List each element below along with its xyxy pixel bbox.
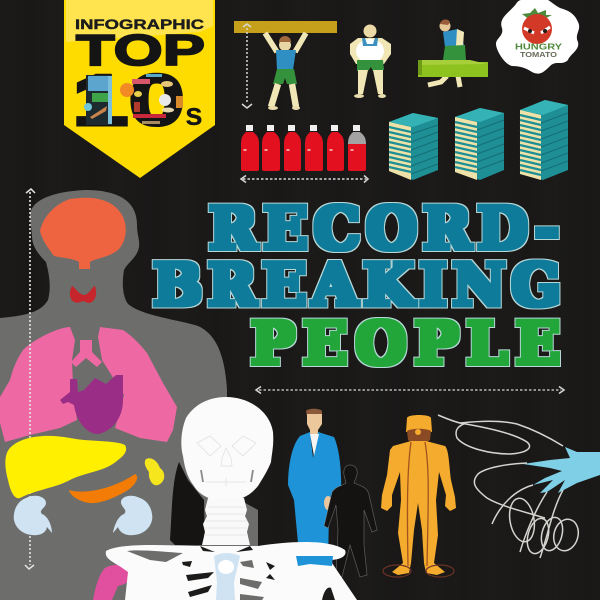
dotted width arrow under bottles <box>241 176 368 182</box>
sternum <box>214 553 240 600</box>
pink arm bone <box>93 565 131 600</box>
series label: 10s <box>72 61 203 141</box>
blue suited tall man <box>288 409 341 565</box>
gaps between ribs <box>127 546 335 600</box>
collarbones and ribcage <box>106 542 357 600</box>
logo wordmark: HUNGRY <box>515 42 562 52</box>
right lung <box>98 327 177 442</box>
brain <box>40 198 126 269</box>
heart <box>60 375 123 434</box>
stack of books 2 <box>455 108 504 180</box>
series label: Infographic: INFOGRAPHIC <box>75 17 204 32</box>
golden man with long hair <box>381 415 456 577</box>
hand with long curling nails <box>438 415 600 558</box>
strongman carrying green block <box>418 20 488 87</box>
left lung <box>0 327 77 442</box>
dotted height arrow beside body <box>25 189 35 569</box>
badge: Infographic Top 10s <box>64 0 215 178</box>
strongman lifting bar overhead <box>234 21 337 110</box>
logo wordmark second line: TOMATO <box>520 52 558 59</box>
series label: 10s: s <box>185 96 203 132</box>
outlined small man silhouette <box>324 465 377 577</box>
right kidney <box>113 496 152 535</box>
skull facial features <box>197 436 256 486</box>
logo: Hungry Tomato <box>496 0 579 74</box>
thyroid <box>70 286 96 303</box>
neck vertebrae <box>202 498 250 545</box>
stack of books 3 <box>520 100 568 180</box>
dotted width arrow under title <box>256 386 564 394</box>
title line: Record-: RECORD- <box>209 194 559 262</box>
title line: People: PEOPLE <box>251 310 560 378</box>
six red bottles <box>241 125 366 171</box>
stack of books 1 <box>389 113 438 180</box>
spleen <box>145 458 164 485</box>
series label: Top: TOP <box>76 26 205 75</box>
series label: 10s: 10 <box>72 61 185 141</box>
title <box>153 194 561 378</box>
strongman with white belly <box>350 24 391 98</box>
skeleton <box>106 397 357 600</box>
lungs <box>0 327 177 442</box>
anatomy figure: grey body silhouette <box>0 190 258 600</box>
title line: Breaking: BREAKING <box>153 251 561 319</box>
pancreas <box>69 474 137 503</box>
dotted height arrow <box>242 24 252 108</box>
black gap between torso and arm <box>170 462 205 545</box>
skull <box>181 397 273 501</box>
left kidney <box>14 496 52 535</box>
windpipe <box>71 340 102 367</box>
liver <box>5 436 126 498</box>
